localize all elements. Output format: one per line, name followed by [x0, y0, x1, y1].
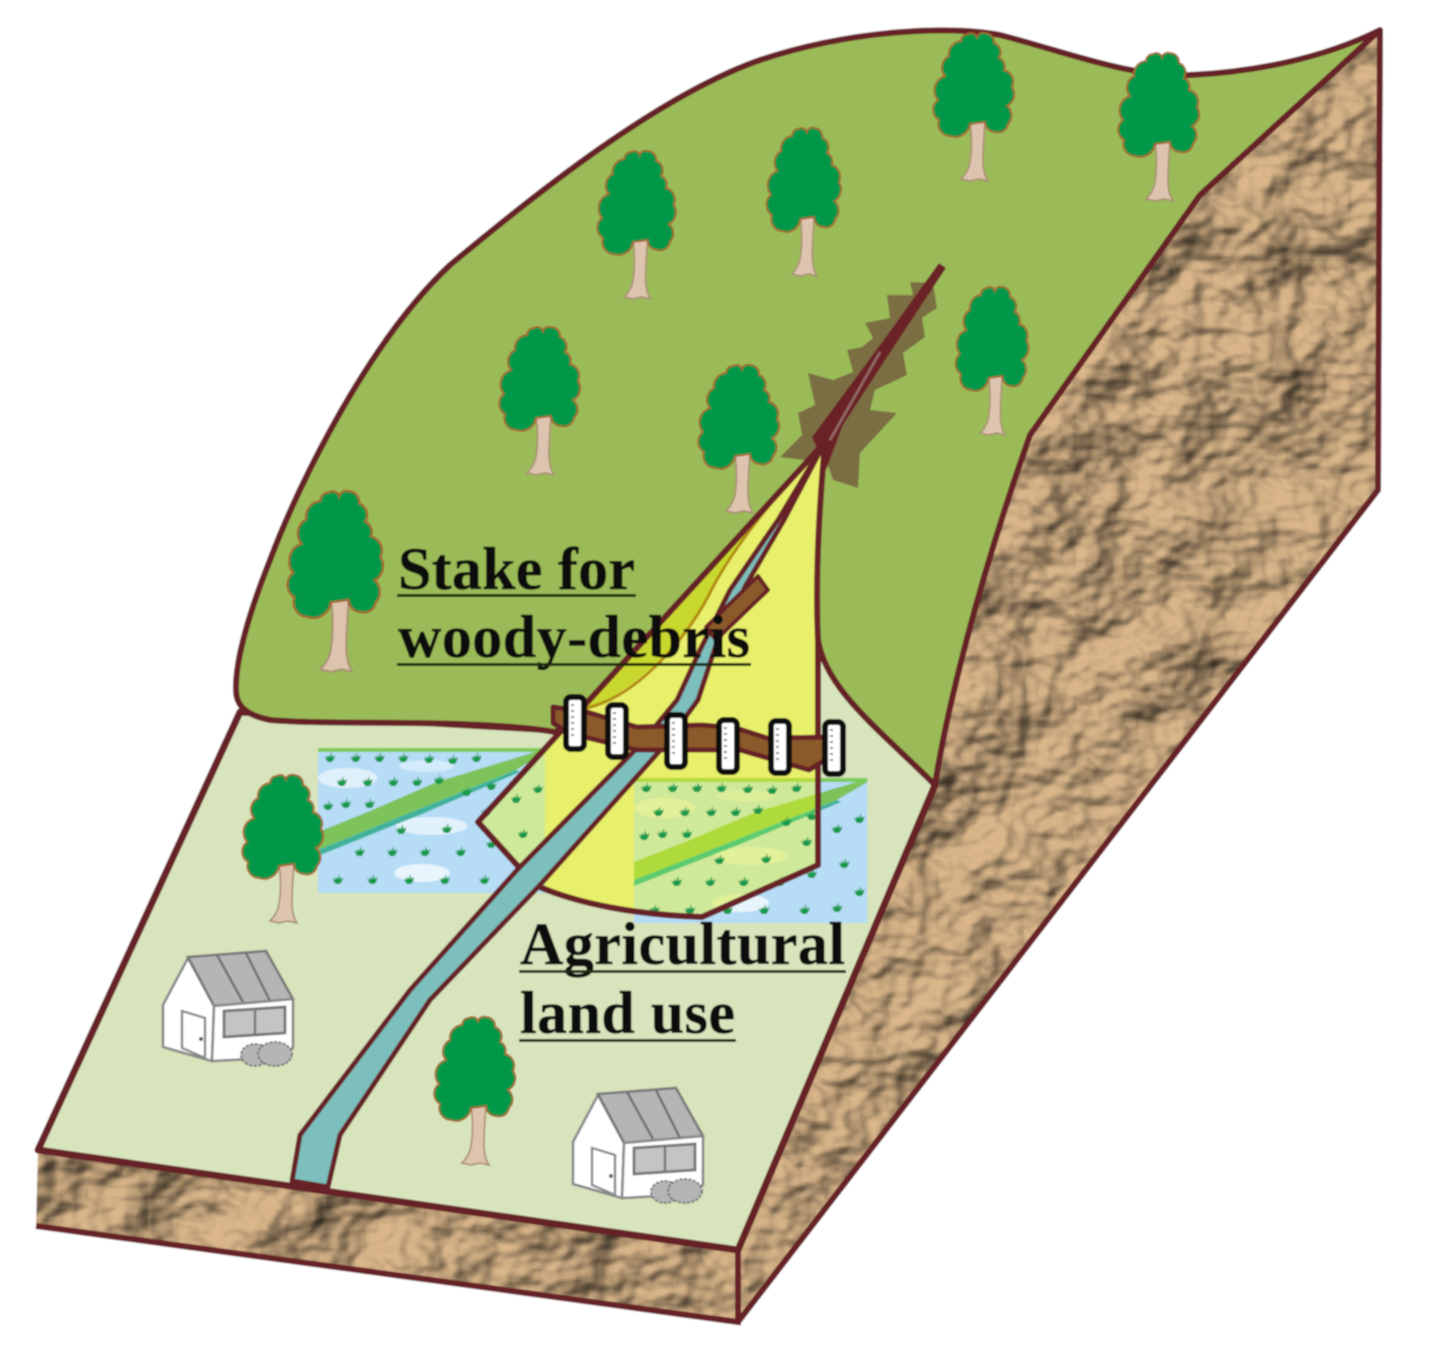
- house: left: [163, 951, 293, 1066]
- gully channel line: [812, 263, 946, 470]
- label: agricultural land use: land use: [520, 980, 735, 1046]
- house: right: [573, 1088, 703, 1203]
- label: agricultural land use: Agricultural: [520, 911, 845, 977]
- debris flow fan: yellow deposit: [474, 446, 826, 921]
- gully erosion scar: [780, 282, 937, 488]
- tree: [1118, 53, 1199, 201]
- river channel: [292, 442, 825, 1187]
- tree: [766, 128, 841, 276]
- label: agricultural land use: [519, 911, 846, 1046]
- forest slope: green hillside: [236, 30, 1380, 785]
- woody debris: diagonal log: [706, 576, 768, 640]
- label: stake for woody-debris: Stake for: [398, 536, 635, 602]
- tree: [242, 775, 323, 923]
- tree: [698, 365, 779, 513]
- tree: [287, 491, 383, 672]
- tree: [499, 327, 580, 475]
- tree: [955, 287, 1029, 435]
- woody debris: logs caught at stakes: [553, 707, 836, 770]
- lowland: pale green valley floor: [38, 640, 935, 1250]
- rock side: front cliff face: [36, 1150, 738, 1322]
- label: stake for woody-debris: woody-debris: [398, 604, 750, 670]
- tree: [434, 1017, 515, 1165]
- paddy field: left: [318, 748, 546, 893]
- paddy field: right: [634, 778, 867, 923]
- stakes row: [566, 697, 843, 774]
- tree: [597, 151, 676, 299]
- rock side: right cliff face: [738, 30, 1380, 1322]
- label: stake for woody-debris: [397, 536, 751, 670]
- tree: [933, 33, 1014, 181]
